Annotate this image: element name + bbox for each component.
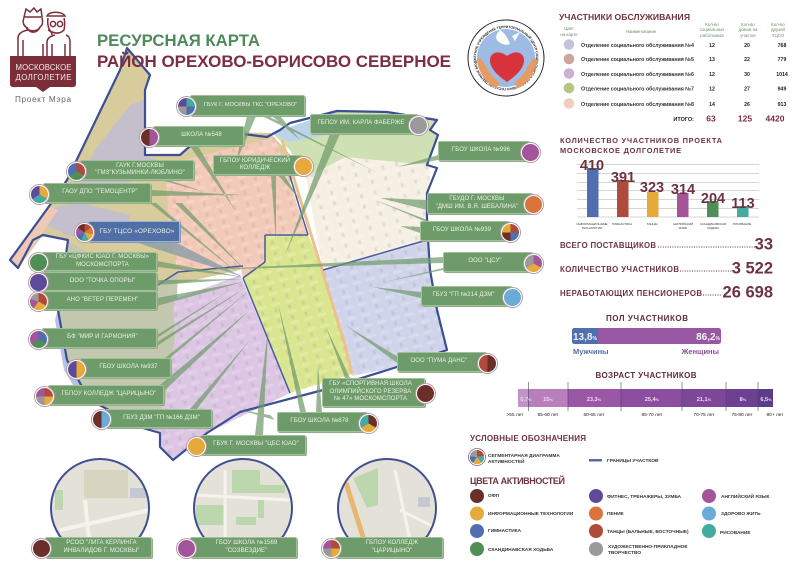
bar chart: количество участников: СКАНДИНАВСКАЯ <box>700 222 726 226</box>
road <box>282 140 352 374</box>
age bar: 15% <box>543 397 553 403</box>
age bar: 23,3% <box>587 397 602 403</box>
age bar: ВОЗРАСТ УЧАСТНИКОВ <box>596 371 697 380</box>
table: участники обслуживания: Отделение социального обслуживания №5 <box>581 56 694 63</box>
age bar: 70-75 лет <box>693 412 715 418</box>
stat: неработающих пенсионеров <box>560 284 773 302</box>
table: участники обслуживания: Наименование <box>626 29 657 34</box>
legend: цвета активностей: ОФП <box>488 493 500 499</box>
age bar <box>507 371 784 418</box>
label: Школа 937 <box>66 358 172 380</box>
stat: количество участников: КОЛИЧЕСТВО УЧАСТНИКОВ <box>560 265 679 274</box>
bar chart: количество участников: ТАНЦЫ <box>647 222 658 226</box>
label: Царицыно нижний: ГБПОУ КОЛЛЕДЖ <box>366 540 418 546</box>
bar chart: количество участников: МОСКОВСКОЕ ДОЛГОЛЕТИЕ <box>560 146 681 155</box>
label: Школа 937: ГБОУ ШКОЛА №937 <box>99 364 158 370</box>
table: участники обслуживания: 63 <box>706 114 716 124</box>
age bar: 25,4% <box>645 397 660 403</box>
legend: условные обозначения: СЕГМЕНТАРНАЯ ДИАГРАММА <box>488 453 560 459</box>
table: участники обслуживания: 4420 <box>766 114 785 124</box>
table: участники обслуживания: 14 <box>709 102 715 108</box>
table: участники обслуживания: ТЦСО <box>772 33 785 38</box>
legend: цвета активностей: ИНФОРМАЦИОННЫЕ ТЕХНОЛОГИИ <box>488 511 574 517</box>
bar chart: количество участников: ЯЗЫК <box>679 226 687 230</box>
logo: Московское долголетие: ДОЛГОЛЕТИЕ <box>16 73 72 82</box>
age bar: >55 лет <box>507 412 524 418</box>
title <box>97 32 451 71</box>
table: участники обслуживания: 949 <box>778 86 786 92</box>
table: участники обслуживания: Цвет <box>564 26 574 31</box>
zone: yellow-green <box>243 235 352 393</box>
zone: cream <box>306 157 430 270</box>
shield <box>10 56 76 92</box>
table: участники обслуживания: ИТОГО: <box>673 117 694 123</box>
table: участники обслуживания: работников <box>700 33 724 38</box>
label: Школа 939: ГБОУ ШКОЛА №939 <box>433 227 491 233</box>
table: участники обслуживания: друзей <box>771 27 786 32</box>
map: district <box>10 48 447 460</box>
bar chart: количество участников: 410 <box>580 158 604 174</box>
label: ТЦСО Орехово: ГБУ ТЦСО «ОРЕХОВО» <box>100 228 174 235</box>
label: Лига кёрлинга: РСОО "ЛИГА КЕРЛИНГА <box>66 540 137 546</box>
age bar: 65-70 лет <box>641 412 663 418</box>
table: участники обслуживания: 1014 <box>776 72 788 78</box>
label: ТКС Орехово <box>176 95 306 117</box>
table: участники обслуживания: УЧАСТНИКИ ОБСЛУЖИВАНИЯ <box>559 12 690 22</box>
label: Темоцентр: ГАОУ ДПО "ТЕМОЦЕНТР" <box>62 189 138 195</box>
table: участники обслуживания: Отделение социального обслуживания №6 <box>581 71 694 78</box>
stat: всего поставщиков: ВСЕГО ПОСТАВЩИКОВ <box>560 241 656 250</box>
label: ТЦСО Орехово <box>74 221 181 243</box>
table: участники обслуживания: Кол-во <box>705 22 719 27</box>
bar chart: количество участников: 391 <box>611 170 635 186</box>
label: ДМШ Шебалина <box>427 193 544 215</box>
label: ТКС Орехово: ГБУК Г. МОСКВЫ ТКС "ОРЕХОВО" <box>204 102 297 108</box>
logo: Московское долголетие: Проект Мэра <box>15 95 71 104</box>
title: РАЙОН ОРЕХОВО-БОРИСОВО СЕВЕРНОЕ <box>97 52 451 71</box>
table: участники обслуживания: 12 <box>709 43 715 49</box>
district boundaries <box>150 160 427 393</box>
table: участники обслуживания: Кол-во <box>741 22 755 27</box>
icon: elderly couple <box>18 8 70 56</box>
label: Колледж Царицыно: ГБПОУ КОЛЛЕДЖ "ЦАРИЦЫНО" <box>62 391 156 397</box>
legend: цвета активностей: ГИМНАСТИКА <box>488 528 522 534</box>
gender bar <box>572 314 721 356</box>
table: участники обслуживания: 22 <box>744 57 750 63</box>
label: ЦБС ЮАО: ГБУК Г. МОСКВЫ "ЦБС ЮАО" <box>213 441 299 447</box>
table: участники обслуживания: Отделение социального обслуживания №4 <box>581 42 694 49</box>
age bar: 75-80 лет <box>731 412 753 418</box>
label: ДМШ Шебалина: "ДМШ ИМ. В.Я. ШЕБАЛИНА" <box>436 204 518 210</box>
zone: lilac <box>143 275 290 460</box>
table: участники обслуживания: Отделение социального обслуживания №8 <box>581 101 694 108</box>
label: Колледж Царицыно <box>34 385 165 407</box>
bar chart: количество участников: РИСОВАНИЕ <box>733 222 751 226</box>
legend: цвета активностей: СКАНДИНАВСКАЯ ХОДЬБА <box>488 547 554 553</box>
table: участники обслуживания: на карте <box>560 32 578 37</box>
legend: цвета активностей: ХУДОЖЕСТВЕННО-ПРИКЛАДНОЕ <box>608 544 688 550</box>
table: участники обслуживания: социальных <box>700 27 725 32</box>
gender bar: 13,8% <box>573 332 597 343</box>
gender bar: Мужчины <box>573 347 609 356</box>
legend: цвета активностей: РИСОВАНИЕ <box>720 530 751 536</box>
inset map: Царицыно <box>337 458 437 537</box>
label: ГП 166 <box>91 409 213 430</box>
table: участники обслуживания: 30 <box>744 72 750 78</box>
table: участники обслуживания: 913 <box>778 102 786 108</box>
age bar: 8% <box>740 397 747 403</box>
gender bar: ПОЛ УЧАСТНИКОВ <box>606 314 688 323</box>
stat: количество участников: 3 522 <box>732 260 773 278</box>
zone: pink <box>165 137 307 278</box>
table: участники обслуживания: Кол-во <box>771 22 785 27</box>
zone: north-west <box>10 48 300 290</box>
label: Пума Данс: ООО "ПУМА ДАНС" <box>411 358 467 364</box>
bar chart: количество участников: КОЛИЧЕСТВО УЧАСТНИКОВ ПРОЕКТА <box>560 136 723 145</box>
stat: неработающих пенсионеров: НЕРАБОТАЮЩИХ ПЕНСИОНЕРОВ <box>560 289 702 298</box>
table: участники обслуживания: 12 <box>709 72 715 78</box>
table: участники обслуживания: участке <box>740 33 756 38</box>
bar chart: количество участников: АНГЛИЙСКИЙ <box>673 222 693 226</box>
table: участники обслуживания: 125 <box>738 114 752 124</box>
age bar: 60-65 лет <box>583 412 605 418</box>
label: ГП 214: ГБУЗ "ГП №214 ДЗМ" <box>432 292 495 298</box>
label: Школа 1569 <box>176 537 298 559</box>
label: Школа 878 <box>277 412 379 434</box>
stat: всего поставщиков <box>560 236 773 254</box>
legend: условные обозначения: ГРАНИЦЫ УЧАСТКОВ <box>607 458 659 464</box>
age bar: 0,7% <box>520 397 532 403</box>
park <box>45 100 170 236</box>
stat: неработающих пенсионеров: 26 698 <box>723 284 773 302</box>
table: участники обслуживания: 13 <box>709 57 715 63</box>
label: Спортивная школа 47: ГБУ «СПОРТИВНАЯ ШКОЛА <box>329 381 412 387</box>
label: Точка опоры: ООО "ТОЧКА ОПОРЫ" <box>70 278 135 284</box>
legend: цвета активностей: ФИТНЕС, ТРЕНАЖЕРЫ, ЗУМБА <box>607 494 682 500</box>
table: участники обслуживания: Отделение социального обслуживания №7 <box>581 86 694 92</box>
table: участники обслуживания: домов на <box>739 27 758 32</box>
label: Царицыно нижний <box>321 537 444 559</box>
label: ЦФКИС <box>28 252 158 272</box>
label: Карла Фаберже: ГБПОУ ИМ. КАРЛА ФАБЕРЖЕ <box>317 120 405 126</box>
label: Ветер перемен: АНО "ВЕТЕР ПЕРЕМЕН" <box>67 297 138 303</box>
label: ГМЗ Кузьминки-Люблино: "ГМЗ"КУЗЬМИНКИ-ЛЮБЛИНО" <box>95 170 185 176</box>
stat: количество участников <box>560 260 773 278</box>
bar chart: количество участников: 113 <box>731 196 755 212</box>
label: Школа 996 <box>438 141 541 163</box>
table: участники обслуживания <box>559 12 788 124</box>
table: участники обслуживания: 12 <box>709 86 715 92</box>
legend: цвета активностей: ТАНЦЫ (БАЛЬНЫЕ, ВОСТОЧНЫЕ) <box>607 529 689 535</box>
bar chart: количество участников: ИНФОРМАЦИОННЫЕ <box>576 222 608 226</box>
label: Точка опоры <box>28 272 158 292</box>
legend: условные обозначения: АКТИВНОСТЕЙ <box>488 457 525 465</box>
age bar: 55-60 лет <box>537 412 559 418</box>
gender bar: 86,2% <box>696 332 721 343</box>
label: Лига кёрлинга: ИНВАЛИДОВ Г. МОСКВЫ" <box>63 548 140 554</box>
label: Спортивная школа 47: ОЛИМПИЙСКОГО РЕЗЕРВА <box>330 389 411 395</box>
inset map: Созвездие <box>193 458 293 537</box>
label: Мир и гармония <box>28 328 158 350</box>
label: ЦФКИС: МОСКОМСПОРТА <box>76 262 129 268</box>
label: Спортивная школа 47: № 47» МОСКОМСПОРТА <box>334 396 407 402</box>
stat: всего поставщиков: 33 <box>755 236 773 254</box>
legend: цвета активностей <box>470 475 770 556</box>
bar chart: количество участников: ТЕХНОЛОГИИ <box>582 226 602 230</box>
legend: цвета активностей: ТВОРЧЕСТВО <box>608 550 641 556</box>
table: участники обслуживания: 27 <box>744 86 750 92</box>
label: Спортивная школа 47 <box>322 378 436 408</box>
label: Карла Фаберже <box>310 114 429 136</box>
label: Школа 1569: "СОЗВЕЗДИЕ" <box>226 548 267 554</box>
bar chart: количество участников: ГИМНАСТИКА <box>612 222 632 226</box>
label: ГП 214 <box>421 286 523 308</box>
table: участники обслуживания: 768 <box>778 43 786 49</box>
age bar: 80+ лет <box>767 412 784 418</box>
inset map: Лига кёрлинга <box>50 458 150 537</box>
label: ЦСУ: ООО "ЦСУ" <box>468 258 502 264</box>
title: РЕСУРСНАЯ КАРТА <box>97 32 260 50</box>
emblem: social centre <box>468 20 544 96</box>
table: участники обслуживания: 779 <box>778 57 786 63</box>
label: Школа 1569: ГБОУ ШКОЛА №1569 <box>216 540 277 546</box>
legend: условные обозначения: УСЛОВНЫЕ ОБОЗНАЧЕНИЯ <box>470 434 586 443</box>
label: Темоцентр <box>29 183 152 205</box>
table: участники обслуживания: 26 <box>744 102 750 108</box>
label: Школа 878: ГБОУ ШКОЛА №878 <box>290 418 349 424</box>
label: ДМШ Шебалина: ГБУДО Г. МОСКВЫ <box>449 196 505 202</box>
label: ГП 166: ГБУЗ ДЗМ "ГП №166 ДЗМ" <box>123 415 200 421</box>
label: Школа 548: ШКОЛА №548 <box>181 132 222 138</box>
age bar: 21,1% <box>697 397 712 403</box>
label: Царицыно нижний: "ЦАРИЦЫНО" <box>372 548 412 554</box>
label: ЦФКИС: ГБУ «ЦФКИС ЮАО Г. МОСКВЫ» <box>56 254 149 260</box>
label: Мир и гармония: БФ "МИР И ГАРМОНИЯ" <box>67 334 138 340</box>
label: Лига кёрлинга <box>31 537 153 559</box>
legend: условные обозначения <box>468 434 659 466</box>
label: ЦСУ <box>443 252 544 274</box>
label: Ветер перемен <box>28 291 158 312</box>
label: Школа 548 <box>139 126 245 148</box>
bar chart: количество участников: 314 <box>671 182 695 198</box>
legend: цвета активностей: АНГЛИЙСКИЙ ЯЗЫК <box>721 492 770 500</box>
logo: Московское долголетие <box>10 8 76 104</box>
rays from labels to sites <box>135 116 443 435</box>
legend: цвета активностей: ПЕНИЕ <box>607 511 625 517</box>
label: Школа 996: ГБОУ ШКОЛА №996 <box>452 147 510 153</box>
table: участники обслуживания: 20 <box>744 43 750 49</box>
bar chart: количество участников: ХОДЬБА <box>707 226 719 230</box>
legend: цвета активностей: ЦВЕТА АКТИВНОСТЕЙ <box>470 475 565 486</box>
age bar: 6,5% <box>760 397 772 403</box>
gender bar: Женщины <box>681 347 719 356</box>
label: Юридический колледж: ГБПОУ ЮРИДИЧЕСКИЙ <box>220 158 290 164</box>
zone: blue <box>323 240 447 376</box>
label: ЦБС ЮАО <box>186 435 307 457</box>
bar chart: количество участников: 204 <box>701 191 725 207</box>
zone: light green north-east <box>272 111 438 178</box>
label: Пума Данс <box>397 352 498 374</box>
logo: Московское долголетие: МОСКОВСКОЕ <box>16 63 72 72</box>
legend: цвета активностей: ЗДОРОВО ЖИТЬ <box>721 511 761 517</box>
label: Юридический колледж: КОЛЛЕДЖ <box>240 165 270 171</box>
label: Юридический колледж <box>213 155 314 177</box>
label: ГМЗ Кузьминки-Люблино <box>66 160 195 182</box>
bar chart: количество участников <box>560 136 759 230</box>
zone: gray-green south-west <box>58 240 178 428</box>
label: Школа 939 <box>420 221 521 243</box>
bar chart: количество участников: 323 <box>640 180 664 196</box>
label: ГМЗ Кузьминки-Люблино: ГАУК Г.МОСКВЫ <box>116 162 164 168</box>
